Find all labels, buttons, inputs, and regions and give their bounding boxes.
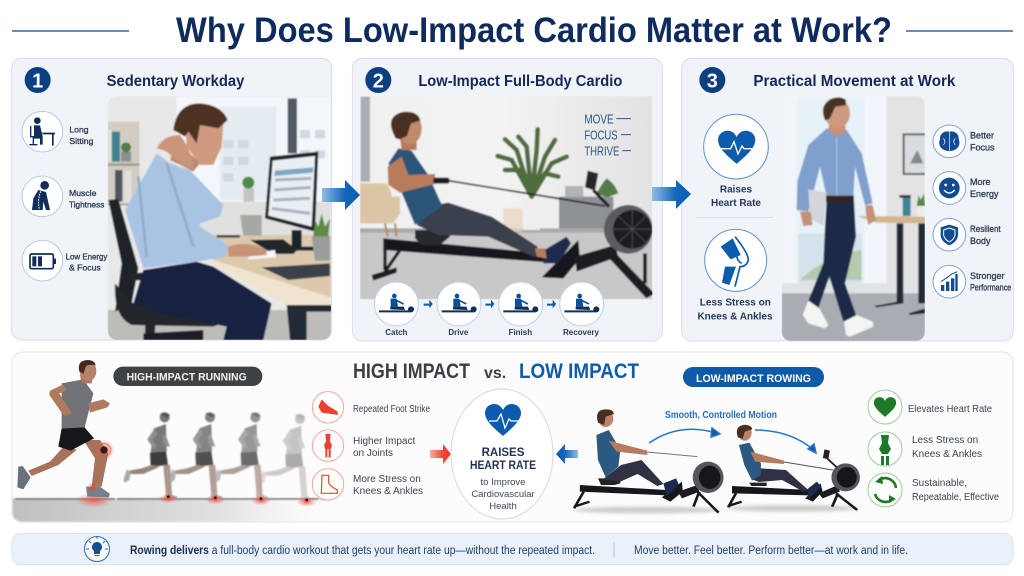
- chair: [108, 199, 138, 312]
- pants: [133, 262, 272, 340]
- arrow: low impact to center: [556, 444, 578, 464]
- number badge 1: [25, 67, 51, 93]
- label: stronger performance: [970, 271, 1011, 293]
- panel: sedentary workday: [12, 58, 332, 340]
- stroke phases row: [374, 282, 604, 337]
- label: low energy and focus: [66, 251, 108, 273]
- arrow: high impact to center: [430, 444, 451, 464]
- heading: low-impact full-body cardio: Low-Impact Full-Body Cardio: [418, 73, 623, 90]
- label: less stress on knees: [912, 435, 982, 460]
- slogan: move focus thrive: [584, 112, 631, 158]
- icon: knee joint: [705, 229, 767, 291]
- slogan: move focus thrive: THRIVE: [584, 144, 619, 158]
- heading: sedentary workday: Sedentary Workday: [107, 73, 244, 90]
- label: raises heart rate: Heart Rate: [711, 198, 761, 209]
- label: better focus: [970, 131, 995, 152]
- arrow: panel 2 to panel 3: [652, 180, 691, 209]
- icon: light bulb: [84, 536, 110, 562]
- headline: high impact vs low impact: [353, 360, 639, 383]
- center text: [470, 447, 536, 512]
- label: stronger performance: Performance: [970, 283, 1011, 293]
- label: better focus: Better: [970, 131, 994, 141]
- icon: green heart: [868, 390, 902, 424]
- motion label: Smooth, Controlled Motion: [665, 410, 777, 421]
- rower 1: [580, 485, 667, 495]
- label: muscle tightness: [69, 188, 105, 209]
- label: low energy and focus: Low Energy: [66, 251, 108, 261]
- label: less stress on knees and ankles: Less Stress on: [700, 298, 771, 309]
- slogan: move focus thrive: FOCUS: [584, 128, 618, 142]
- pill: low-impact rowing: [683, 367, 824, 387]
- icon: running shoe: [312, 392, 344, 423]
- center text: Health: [489, 501, 517, 512]
- icon: foot outline: [312, 469, 344, 500]
- label: resilient body: Body: [970, 236, 991, 246]
- fading runner sequence: [123, 412, 313, 501]
- label: sustainable repeatable effective: Sustainable,: [912, 478, 967, 489]
- label: stronger performance: Stronger: [970, 271, 1004, 281]
- label: elevates heart rate: Elevates Heart Rate: [908, 404, 992, 415]
- icon: long sitting: [22, 111, 63, 152]
- ground strip: [13, 498, 340, 522]
- icon: rising bar chart: [933, 265, 966, 298]
- icon: heart rate: [704, 114, 768, 179]
- stroke phases row: Finish: [509, 328, 532, 337]
- label: muscle tightness: Muscle: [69, 188, 97, 198]
- label: more energy: Energy: [970, 189, 999, 199]
- desk: [212, 234, 331, 298]
- pill: high-impact running: HIGH-IMPACT RUNNING: [127, 371, 247, 383]
- shirt: [125, 153, 228, 268]
- rowers illustration: [574, 409, 860, 513]
- title: Why Does Low-Impact Cardio Matter at Work?: [176, 11, 892, 50]
- list: high impact effects: on Joints: [353, 448, 393, 459]
- label: long sitting: Sitting: [69, 136, 94, 146]
- center text: to Improve: [481, 477, 525, 488]
- label: less stress on knees: Knees & Ankles: [912, 449, 982, 460]
- icon: green knee: [868, 432, 902, 466]
- stroke phases row: Recovery: [563, 328, 600, 337]
- label: long sitting: Long: [69, 124, 89, 134]
- impact markers on ghost runners: [158, 469, 317, 507]
- panel: high impact vs low impact: [12, 352, 1013, 522]
- list: high impact effects: Higher Impact: [353, 436, 415, 447]
- list: high impact effects: Repeated Foot Strike: [353, 404, 430, 415]
- heading: practical movement at work: Practical Movement at Work: [753, 73, 955, 90]
- photo: man walking in office: [782, 96, 925, 341]
- label: better focus: Focus: [970, 142, 995, 152]
- number badge 2: [365, 67, 391, 93]
- label: raises heart rate: [711, 184, 761, 209]
- headline: high impact vs low impact: LOW IMPACT: [519, 360, 639, 383]
- photo: man rowing: [360, 96, 653, 299]
- label: low energy and focus: & Focus: [69, 263, 101, 273]
- label: sustainable repeatable effective: Repeatable, Effective: [912, 492, 999, 503]
- panel: practical movement at work: [682, 58, 1013, 341]
- list: high impact effects: [353, 404, 430, 497]
- label: muscle tightness: Tightness: [69, 199, 105, 209]
- rower 2: [732, 486, 809, 495]
- headline: high impact vs low impact: HIGH IMPACT: [353, 360, 470, 383]
- label: less stress on knees: Less Stress on: [912, 435, 978, 446]
- footer tagline: Move better. Feel better. Perform better—at work and in life.: [634, 545, 908, 557]
- stroke phases row: Drive: [448, 328, 469, 337]
- slogan: move focus thrive: MOVE: [584, 112, 614, 126]
- label: less stress on knees and ankles: Knees & Ankles: [697, 311, 773, 322]
- list: high impact effects: More Stress on: [353, 474, 421, 485]
- icon: joint: [312, 430, 344, 461]
- label: more energy: [970, 177, 999, 199]
- footer message: Rowing delivers a full-body cardio workout that gets your heart rate up—without the repeated impact.: [130, 545, 595, 557]
- label: resilient body: [970, 224, 1001, 246]
- center text: RAISES: [482, 447, 525, 459]
- icon: green cycle: [868, 473, 902, 507]
- icon: muscle tightness: [22, 176, 63, 217]
- number badge 1: 1: [32, 70, 43, 92]
- label: sustainable repeatable effective: [912, 478, 999, 503]
- rowing machine: [383, 238, 545, 262]
- label: more energy: More: [970, 177, 990, 187]
- icon: shield: [933, 218, 966, 251]
- list: high impact effects: Knees & Ankles: [353, 486, 423, 497]
- running illustration: [13, 360, 344, 522]
- label: resilient body: Resilient: [970, 224, 1001, 234]
- stroke phases row: Catch: [385, 328, 408, 337]
- label: long sitting: [69, 124, 94, 146]
- arrows: motion arcs: [649, 428, 816, 453]
- number badge 3: [699, 67, 725, 93]
- rower body: [417, 203, 538, 257]
- arrow: panel 1 to panel 2: [322, 180, 360, 210]
- label: raises heart rate: Raises: [720, 184, 753, 195]
- center text: HEART RATE: [470, 460, 536, 472]
- monitor: [290, 229, 314, 252]
- panel: low-impact full-body cardio: [352, 58, 662, 341]
- head and arm: [170, 153, 200, 172]
- center oval: raises heart rate: [451, 389, 553, 519]
- headline: high impact vs low impact: vs.: [484, 365, 506, 382]
- icon: smiling face: [933, 172, 966, 204]
- number badge 2: 2: [373, 70, 384, 92]
- number badge 3: 3: [707, 70, 718, 92]
- footer banner: [12, 534, 1013, 564]
- center text: Cardiovascular: [471, 489, 535, 500]
- icon: heart: [485, 404, 521, 436]
- icon: brain: [933, 125, 966, 158]
- pill: high-impact running: [113, 367, 262, 386]
- photo: man at desk with neck pain: [108, 96, 332, 340]
- label: less stress on knees and ankles: [697, 298, 773, 322]
- icon: low battery: [22, 240, 63, 281]
- pill: low-impact rowing: LOW-IMPACT ROWING: [696, 373, 811, 385]
- main runner: [17, 360, 115, 507]
- walker: [808, 198, 857, 322]
